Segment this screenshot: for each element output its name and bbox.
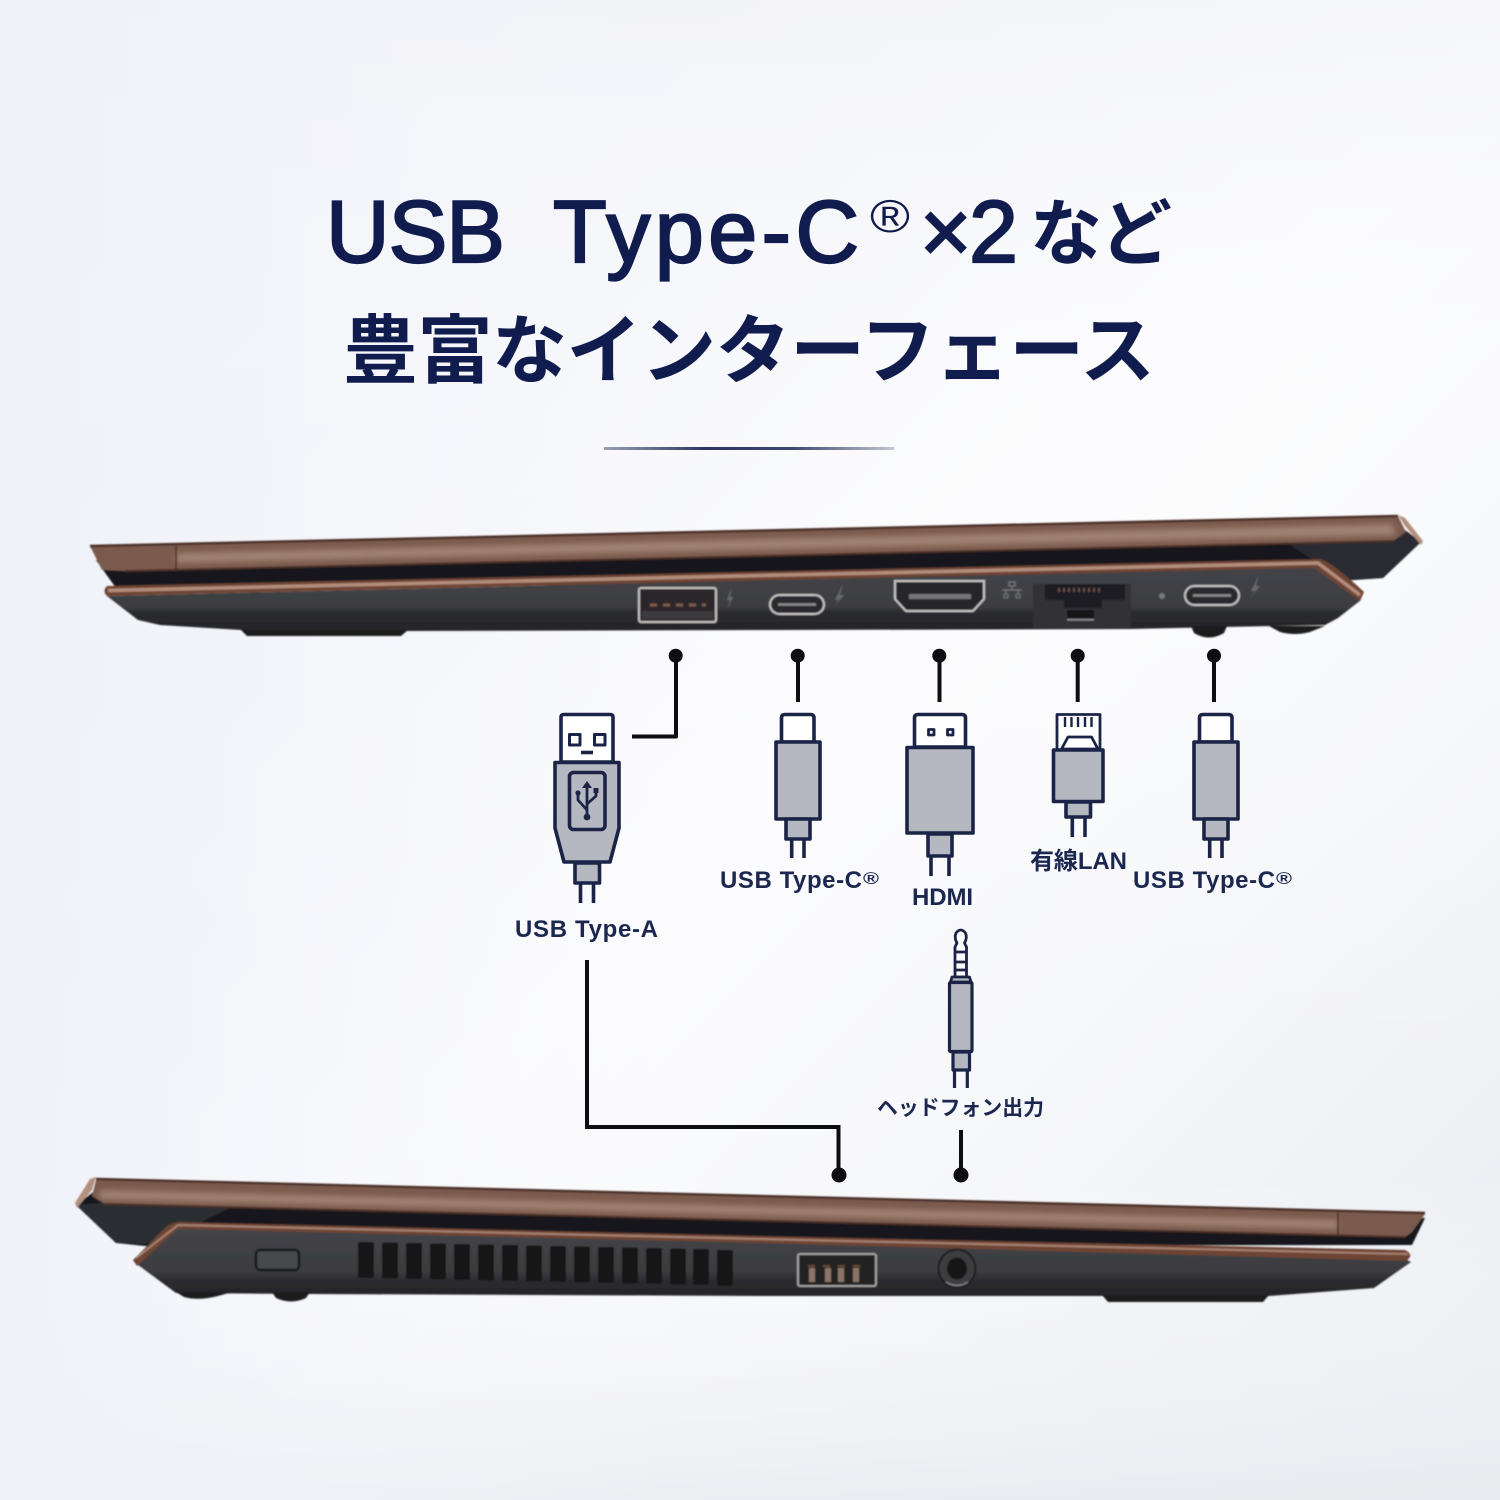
icon: thunderbolt [727, 587, 733, 610]
icon: LAN [1002, 582, 1022, 598]
cable [786, 819, 810, 858]
connector: USB Type-C right [1194, 649, 1238, 858]
laptop: left side view with ports [75, 1177, 1425, 1302]
connector: USB Type-A [555, 649, 683, 903]
connector: USB Type-C left [776, 649, 820, 858]
base trim [104, 559, 1364, 601]
label: USB Type-C left: USB Type-C [720, 867, 862, 894]
base trim [133, 1222, 1410, 1266]
base body [134, 1229, 1411, 1296]
hinge and under-lid shadow [96, 530, 1421, 588]
lid [75, 1177, 1425, 1237]
cable [1066, 802, 1090, 837]
title [326, 182, 1172, 393]
divider [604, 447, 894, 450]
port: USB Type-A [639, 588, 716, 622]
plug head [914, 714, 966, 747]
cable [953, 1052, 970, 1088]
plug [782, 714, 814, 742]
plug body [1054, 750, 1103, 802]
label: USB Type-C right: ® [1276, 869, 1293, 888]
icon: thunderbolt [1250, 575, 1260, 598]
plug body [1194, 742, 1238, 819]
cable [1204, 819, 1228, 858]
port: USB Type-C right [1185, 586, 1239, 605]
lid [90, 515, 1423, 571]
port: headphone jack [938, 1250, 976, 1288]
leader line [1207, 649, 1221, 702]
plug head [1057, 714, 1100, 750]
title: USB [326, 182, 505, 281]
leader line: USB Type-A to left side port [587, 960, 846, 1182]
label: headphone output: ヘッドフォン出力 [877, 1097, 1044, 1120]
rubber feet [176, 1292, 1269, 1302]
label: USB Type-C right: USB Type-C [1133, 867, 1275, 894]
plug body [555, 762, 619, 862]
cable [928, 834, 952, 876]
leader line [632, 649, 683, 736]
port: USB Type-A [798, 1254, 876, 1286]
connector: headphone jack [950, 930, 972, 1088]
title: 豊富なインターフェース [343, 309, 1155, 393]
leader line [791, 649, 805, 702]
connector: wired LAN [1054, 649, 1103, 837]
leader line: headphone output [954, 1130, 968, 1182]
leader line [1071, 649, 1085, 702]
icon: thunderbolt [834, 584, 844, 607]
label: USB Type-A: USB Type-A [515, 916, 658, 943]
strain relief and cable [575, 863, 600, 903]
port: HDMI [895, 581, 984, 611]
indicator LED [1159, 593, 1165, 599]
jack tip [950, 930, 971, 982]
hinge and under-lid shadow [76, 1190, 1425, 1246]
title: など [1030, 195, 1172, 275]
label: HDMI: HDMI [912, 884, 973, 911]
label: wired LAN: 有線LAN [1030, 848, 1127, 875]
switch: power [256, 1250, 299, 1270]
laptop: right side view with ports [90, 515, 1423, 638]
connector: HDMI [907, 649, 973, 876]
plug body [907, 748, 973, 833]
plug head [561, 714, 613, 762]
rubber feet [241, 626, 1325, 638]
jack body [950, 982, 972, 1052]
USB symbol [570, 772, 605, 830]
title: ® [870, 190, 910, 242]
base body [107, 568, 1361, 631]
title: ×2 [920, 182, 1018, 281]
leader line [932, 649, 946, 702]
ventilation grille [358, 1242, 733, 1286]
port: USB Type-C left [770, 595, 824, 614]
title: Type-C [553, 182, 859, 281]
port: LAN [1033, 584, 1131, 628]
plug body [776, 742, 820, 819]
plug [1200, 714, 1232, 742]
label: USB Type-C left: ® [863, 869, 880, 888]
